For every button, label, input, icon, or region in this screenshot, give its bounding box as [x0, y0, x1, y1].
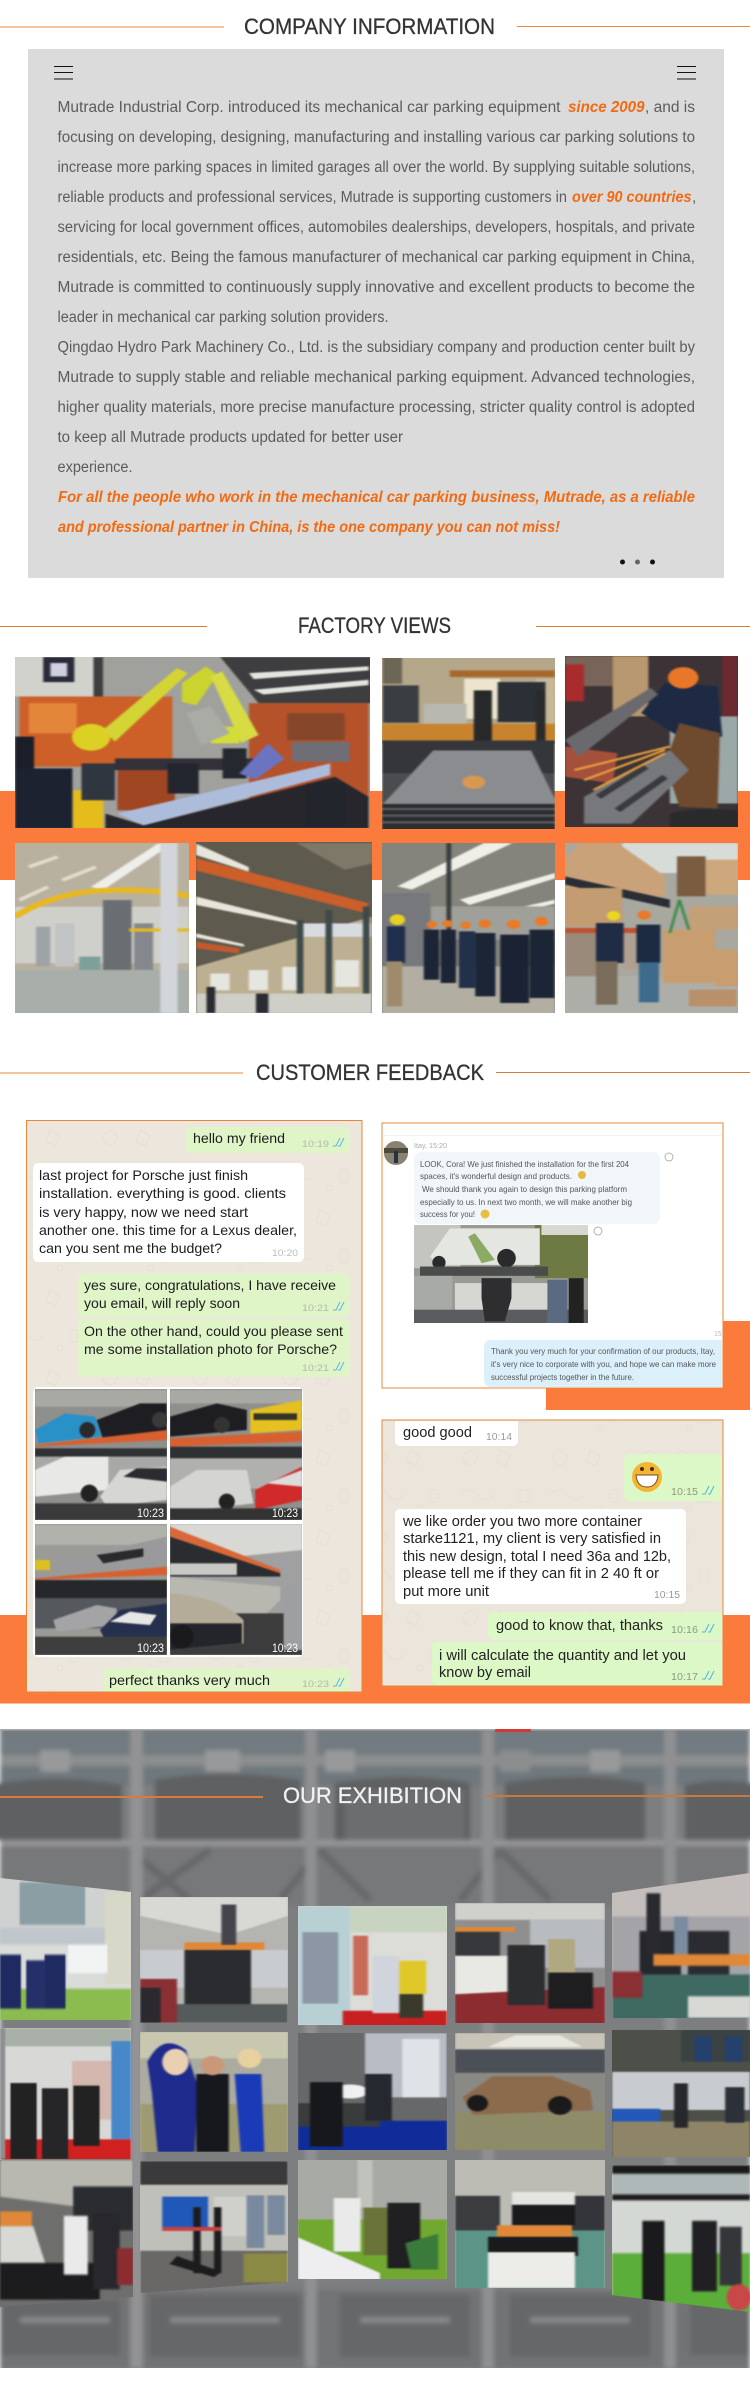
- photo: meeting on blue carpet: [298, 2033, 447, 2150]
- message: Porsche installation finished: [33, 1163, 304, 1262]
- photo: two men at booth: [298, 1906, 447, 2025]
- text block: company introduction: Mutrade to supply stable and reliable mechanical parking equipment. Advanced technologies,: [58, 369, 695, 386]
- section: factory views: [0, 613, 750, 1017]
- photo: lift and people on platform: [612, 1873, 750, 2018]
- icon: three dots: [620, 560, 655, 564]
- text block: company introduction: leader in mechanical car parking solution providers.: [58, 309, 388, 326]
- photo: row of cars: [170, 1524, 302, 1655]
- message: calculate quantity: know by email: [439, 1665, 531, 1681]
- photo: warehouse with boxes: [565, 843, 738, 1013]
- message: thank you reply: successful projects together in the future.: [491, 1372, 634, 1382]
- photo: crowd by window: [612, 2165, 750, 2312]
- section: customer feedback: [0, 1060, 750, 1704]
- message: good good: [395, 1421, 518, 1446]
- message: good to know: 10:16: [671, 1625, 698, 1636]
- message: container order: we like order you two more container: [402, 1514, 642, 1530]
- icon: smiley outlines: [594, 1153, 673, 1235]
- text block: company introduction: Qingdao Hydro Park Machinery Co., Ltd. is the subsidiary company and production center built by: [58, 339, 695, 356]
- photo: three men at table: [298, 2160, 447, 2279]
- chat screenshot: container order: [382, 1420, 723, 1686]
- photo grid: parked cars: [32, 1387, 305, 1658]
- section: our exhibition: [0, 1720, 750, 2380]
- background: parking structure: [0, 1730, 750, 2368]
- text block: company introduction: residentials, etc. Being the famous manufacturer of mechanical car parking equipment in China,: [58, 249, 695, 266]
- section: company information: [0, 14, 750, 578]
- icon: right menu lines: [677, 66, 696, 79]
- red tab: [495, 1729, 531, 1732]
- photo: plasma cutting table: [382, 658, 555, 829]
- heading: our exhibition: OUR EXHIBITION: [283, 1783, 462, 1808]
- message: container order: put more unit: [403, 1584, 489, 1600]
- photo wall: exhibition booths: [0, 1866, 750, 2319]
- message: installation finished: We should thank you again to design this parking platform: [422, 1184, 627, 1194]
- message: thank you reply: [484, 1340, 722, 1387]
- callout: closing statement: [58, 489, 695, 536]
- text block: company introduction: [58, 99, 696, 476]
- text block: company introduction: focusing on developing, designing, manufacturing and installing various car parking solutions to: [58, 129, 695, 146]
- message: installation finished: LOOK, Cora! We just finished the installation for the first 204: [420, 1159, 629, 1169]
- text block: company introduction: experience.: [58, 459, 132, 476]
- photo: coating line workshop: [15, 843, 189, 1013]
- photo: welding robot: [15, 657, 370, 828]
- message: thank you reply: it's very nice to corporate with you, and hope we can make more: [491, 1359, 716, 1369]
- heading: factory views: FACTORY VIEWS: [298, 613, 451, 638]
- photo: lift demonstration in tent: [140, 1897, 288, 2023]
- photo: black and yellow cars: [170, 1389, 302, 1520]
- photo: booth with people in tent: [0, 2160, 133, 2307]
- message: good good: 10:14: [486, 1432, 512, 1443]
- message: congratulations reply: 10:21: [302, 1303, 329, 1314]
- message: installation photo request: [78, 1319, 350, 1377]
- callout: closing statement: For all the people who work in the mechanical car parking business, Mutrade, as a reliable: [58, 489, 695, 506]
- message: perfect thanks: perfect thanks very much: [109, 1672, 270, 1688]
- heading: company information: COMPANY INFORMATION: [244, 14, 495, 39]
- chat screenshot: Porsche project: [26, 1120, 362, 1692]
- photo: booth with blue screen: [140, 2161, 288, 2293]
- photo: team on lift with banner: [455, 2160, 605, 2288]
- photo grid: parked cars: 10:23: [137, 1643, 164, 1655]
- photo: blue and black cars: [35, 1389, 167, 1520]
- message: calculate quantity: [432, 1642, 722, 1686]
- text block: company introduction: ,: [692, 189, 696, 206]
- message: Porsche installation finished: another one. this time for a Lexus dealer,: [39, 1222, 297, 1238]
- message: congratulations reply: yes sure, congratulations, I have receive: [84, 1277, 336, 1293]
- message: container order: starke1121, my client is very satisfied in: [403, 1531, 661, 1547]
- top edge highlight: [0, 1729, 750, 1730]
- timestamp fragment: 15:: [714, 1331, 724, 1338]
- orange band: lower: [0, 1615, 750, 1704]
- icon: left menu lines: [54, 66, 73, 79]
- message: perfect thanks: 10:23: [302, 1679, 329, 1690]
- message: good to know: good to know that, thanks: [496, 1618, 663, 1634]
- photo: wrapped car: [455, 2033, 605, 2150]
- message: calculate quantity: i will calculate the quantity and let you: [439, 1648, 686, 1664]
- text block: company introduction: Mutrade Industrial Corp. introduced its mechanical car parking equipment: [58, 99, 561, 116]
- photo: team at booth: [0, 1878, 131, 2020]
- orange band: [0, 791, 750, 880]
- message: Porsche installation finished: can you sent me the budget?: [39, 1240, 222, 1256]
- callout: closing statement: and professional partner in China, is the one company you can not miss!: [58, 519, 560, 536]
- text block: company introduction: to keep all Mutrade products updated for better user: [58, 429, 403, 446]
- message: installation finished: [414, 1152, 660, 1224]
- sender name and time: Itay, 15:20: [414, 1143, 447, 1150]
- message: container order: this new design, total I need 36a and 12b,: [403, 1549, 671, 1565]
- text block: company introduction: , and is: [645, 99, 695, 116]
- message: congratulations reply: you email, will reply soon: [84, 1295, 240, 1311]
- message: installation photo request: 10:21: [302, 1363, 329, 1374]
- photo: large exhibition hall: [612, 2030, 750, 2157]
- message: calculate quantity: 10:17: [671, 1672, 698, 1683]
- message: installation photo request: me some installation photo for Porsche?: [84, 1341, 337, 1357]
- photo: silver cars: [35, 1524, 167, 1655]
- message: hello my friend: [186, 1127, 350, 1153]
- message: Porsche installation finished: 10:20: [272, 1248, 298, 1259]
- chat screenshot: Itay confirmation: [382, 1123, 724, 1388]
- message: smiling emoji: [624, 1454, 722, 1501]
- photo: three suited men: [0, 2028, 131, 2159]
- text block: company introduction: increase more parking spaces in limited garages all over the world. By supplying suitable solutions,: [58, 159, 695, 176]
- icon: avatar: [384, 1141, 408, 1165]
- text block: company introduction: Mutrade is committed to continuously supply innovative and excellent products to become the: [58, 279, 695, 296]
- photo grid: parked cars: 10:23: [137, 1508, 164, 1520]
- message: container order: 10:15: [654, 1590, 680, 1601]
- photo grid: parked cars: 10:23: [272, 1508, 298, 1520]
- message: container order: [395, 1509, 686, 1604]
- message: installation finished: especially to us. In next two month, we will make another big: [420, 1197, 632, 1207]
- photo grid: parked cars: 10:23: [272, 1643, 298, 1655]
- panel: company text: [28, 49, 724, 578]
- photo: mascot with man and woman: [140, 2032, 288, 2152]
- message: smiling emoji: 10:15: [671, 1487, 698, 1498]
- message: good to know: [488, 1612, 722, 1640]
- photo: kneeling men at table: [455, 1903, 605, 2023]
- heading: customer feedback: CUSTOMER FEEDBACK: [256, 1060, 484, 1085]
- photo: van on parking platform: [414, 1225, 588, 1323]
- message: installation finished: spaces, it's wonderful design and products.: [420, 1171, 572, 1181]
- text block: company introduction: over 90 countries: [572, 189, 692, 206]
- message: Porsche installation finished: is very happy, now we need start: [39, 1204, 248, 1220]
- message: Porsche installation finished: last project for Porsche just finish: [39, 1167, 248, 1183]
- orange block: behind right chat: [546, 1321, 750, 1410]
- message: installation finished: success for you!: [420, 1209, 475, 1219]
- photo: team of workers: [382, 843, 555, 1013]
- message: container order: please tell me if they can fit in 2 40 ft or: [403, 1566, 659, 1582]
- text block: company introduction: higher quality materials, more precise manufacture processing, stricter quality control is adopted: [58, 399, 695, 416]
- message: thank you reply: Thank you very much for your confirmation of our products, Itay,: [491, 1346, 715, 1356]
- text block: company introduction: reliable products and professional services, Mutrade is supporting customers in: [58, 189, 567, 206]
- text block: company introduction: servicing for local government offices, automobiles dealerships, developers, hospitals, and private: [58, 219, 695, 236]
- message: hello my friend: hello my friend: [193, 1130, 285, 1146]
- photo: overhead crane hall: [196, 842, 372, 1013]
- message: Porsche installation finished: installation. everything is good. clients: [39, 1185, 286, 1201]
- message: hello my friend: 10:19: [302, 1139, 329, 1150]
- message: congratulations reply: [78, 1273, 350, 1317]
- photo: worker grinding metal: [565, 656, 738, 827]
- message: good good: good good: [403, 1424, 472, 1441]
- text block: company introduction: since 2009: [568, 99, 645, 116]
- message: perfect thanks: [103, 1668, 350, 1692]
- message: installation photo request: On the other hand, could you please sent: [84, 1323, 343, 1339]
